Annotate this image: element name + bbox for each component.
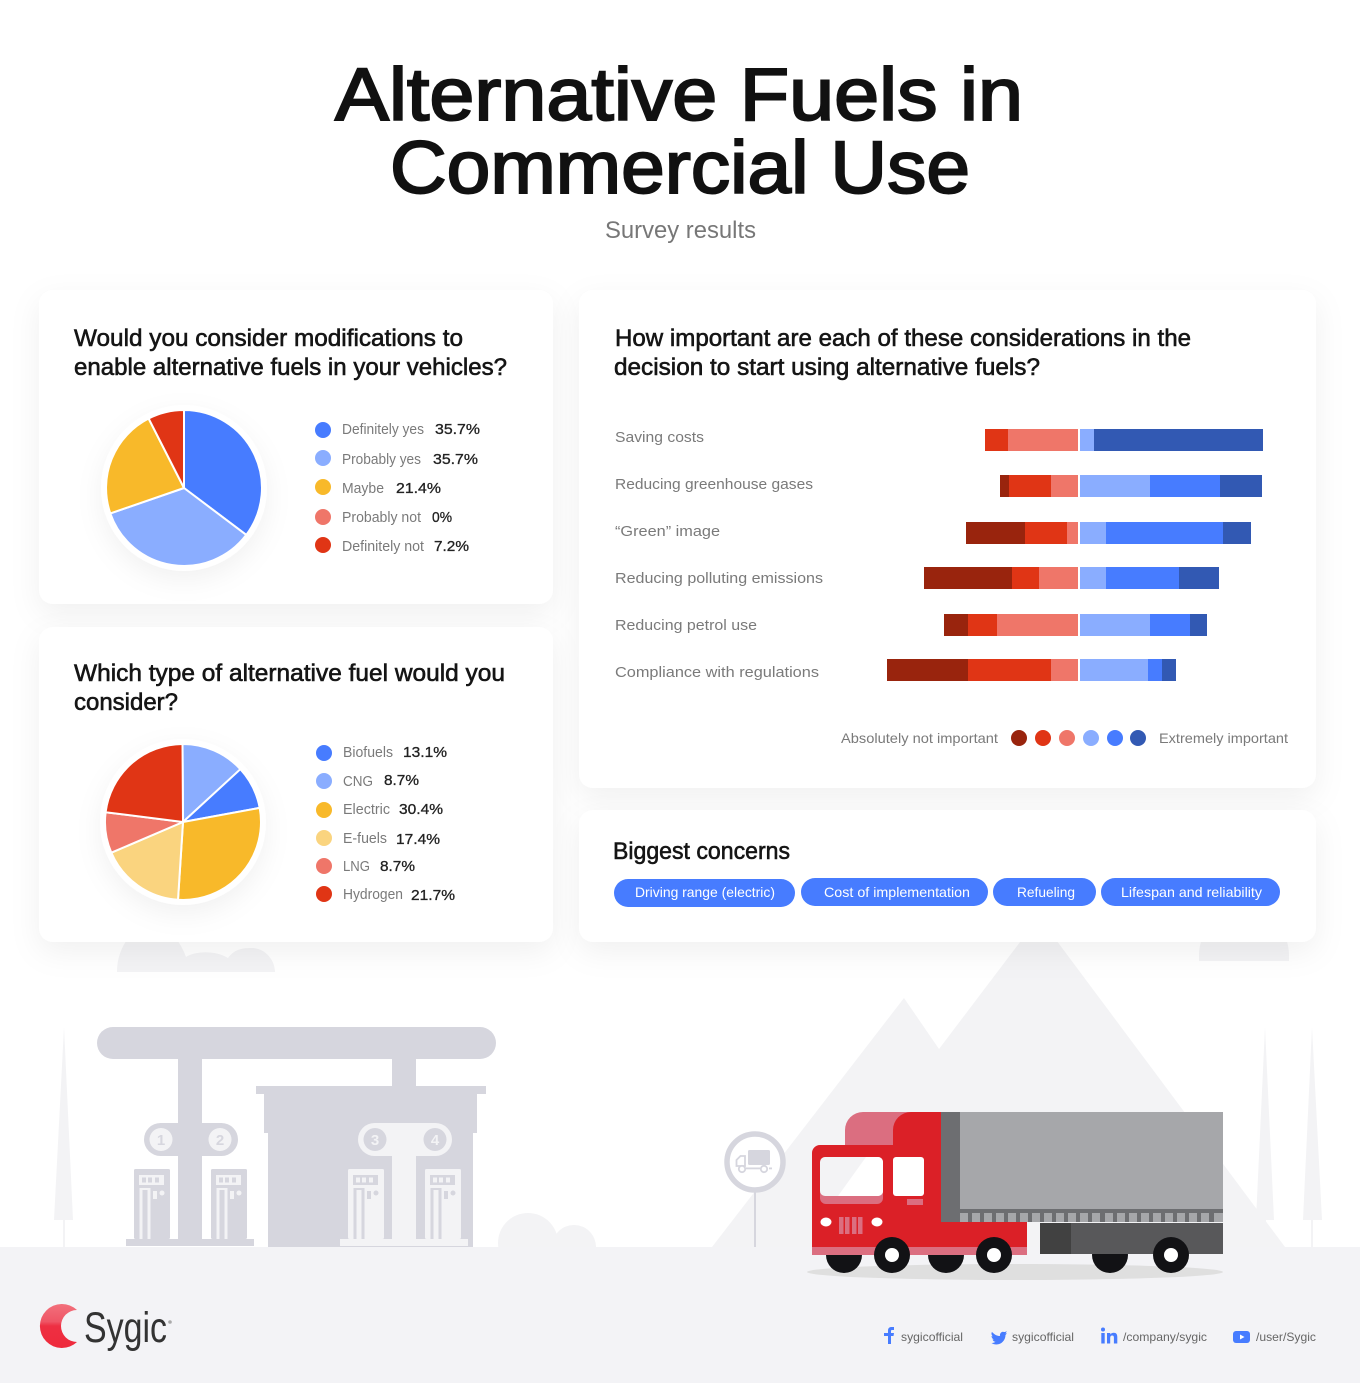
legend: Definitely yes [342,421,424,438]
pump 1 [134,1169,170,1239]
icon: linkedin [1101,1328,1117,1344]
background scene [0,910,1360,1383]
cloud right [1199,910,1289,961]
row labels: Reducing greenhouse gases [615,476,813,493]
concern pills [614,878,1280,907]
pump sign 1-2 [144,1123,238,1156]
icon: youtube [1233,1331,1250,1343]
front wheels [874,1237,1189,1273]
legend: 35.7% [435,421,480,438]
truck [807,1112,1223,1280]
scale legend: Absolutely not important [841,730,998,746]
gas station [97,1027,496,1247]
concern pills: Driving range (electric) [635,884,775,900]
rear wheels [826,1237,1128,1273]
pump sign 1-2: 1 [157,1132,165,1149]
legend: CNG [343,773,373,790]
scale legend [841,730,1288,746]
legend: 21.4% [396,480,441,497]
ground [0,1247,1360,1383]
cab [812,1112,1027,1255]
pump islands [126,1239,468,1246]
pump sign 3-4 [358,1123,452,1156]
panel: modifications survey [39,290,553,604]
legend [315,421,480,555]
legend: 0% [432,509,452,526]
trailer [941,1112,1223,1254]
panel: fuel type survey [39,627,553,942]
heading [74,660,505,716]
legend: 35.7% [433,451,478,468]
legend: 8.7% [384,772,419,789]
social links: sygicofficial [1012,1330,1074,1344]
legend: Biofuels [343,744,393,761]
icon: facebook [884,1327,894,1344]
legend: 7.2% [434,538,469,555]
legend [316,744,455,904]
legend: 8.7% [380,858,415,875]
legend: Maybe [342,480,384,497]
trees [54,1027,1322,1247]
row labels: Reducing polluting emissions [615,570,823,587]
heading: consider? [74,689,178,716]
panel: biggest concerns [579,810,1316,942]
row labels [615,429,823,681]
pump sign 3-4: 4 [431,1132,440,1149]
subtitle: Survey results [605,217,756,244]
canopy [97,1027,496,1239]
pump sign 1-2: 2 [216,1132,224,1149]
pump 3 [348,1169,384,1239]
title [335,53,1023,209]
heading [614,325,1191,381]
legend: Probably not [342,509,422,526]
logo: Sygic [40,1304,172,1352]
scale legend: Extremely important [1159,730,1288,746]
pump 4 [425,1169,461,1239]
pump sign 3-4: 3 [371,1132,379,1149]
social links: sygicofficial [901,1330,963,1344]
heading [74,325,507,381]
legend: Electric [343,801,390,818]
legend: LNG [343,858,370,875]
legend: 17.4% [396,831,440,848]
concern pills: Refueling [1017,884,1075,900]
title: Commercial Use [390,126,970,209]
heading: decision to start using alternative fuels? [614,354,1040,381]
cloud by station [498,1213,596,1273]
row labels: Reducing petrol use [615,617,757,634]
pump 2 [211,1169,247,1239]
pie chart [101,405,267,571]
concern pills: Cost of implementation [824,884,970,900]
legend: Probably yes [342,451,421,468]
pie chart [100,739,266,905]
legend: 21.7% [411,887,455,904]
concern pills: Lifespan and reliability [1121,884,1262,900]
heading: Would you consider modifications to [74,325,463,352]
heading: enable alternative fuels in your vehicles? [74,354,507,381]
legend: Hydrogen [343,886,403,903]
social links: /company/sygic [1123,1330,1207,1344]
road sign [727,1134,783,1247]
heading: Which type of alternative fuel would you [74,660,505,687]
heading: How important are each of these considerations in the [615,325,1191,352]
truck shadow [807,1264,1223,1280]
legend: 13.1% [403,744,447,761]
title: Alternative Fuels in [335,53,1023,136]
icon: twitter [991,1331,1007,1344]
diverging bar chart [887,429,1263,681]
row labels: Compliance with regulations [615,664,819,681]
legend: E-fuels [343,830,387,847]
row labels: Saving costs [615,429,704,446]
social links: /user/Sygic [1256,1330,1316,1344]
legend: Definitely not [342,538,425,555]
legend: 30.4% [399,801,443,818]
social links [884,1327,1316,1344]
row labels: “Green” image [615,523,720,540]
building [256,1086,486,1247]
logo: Sygic: Sygic [84,1304,167,1352]
panel: considerations [579,290,1316,788]
cloud left [117,925,275,972]
heading: Biggest concerns [613,838,790,865]
mountains [712,917,1285,1247]
